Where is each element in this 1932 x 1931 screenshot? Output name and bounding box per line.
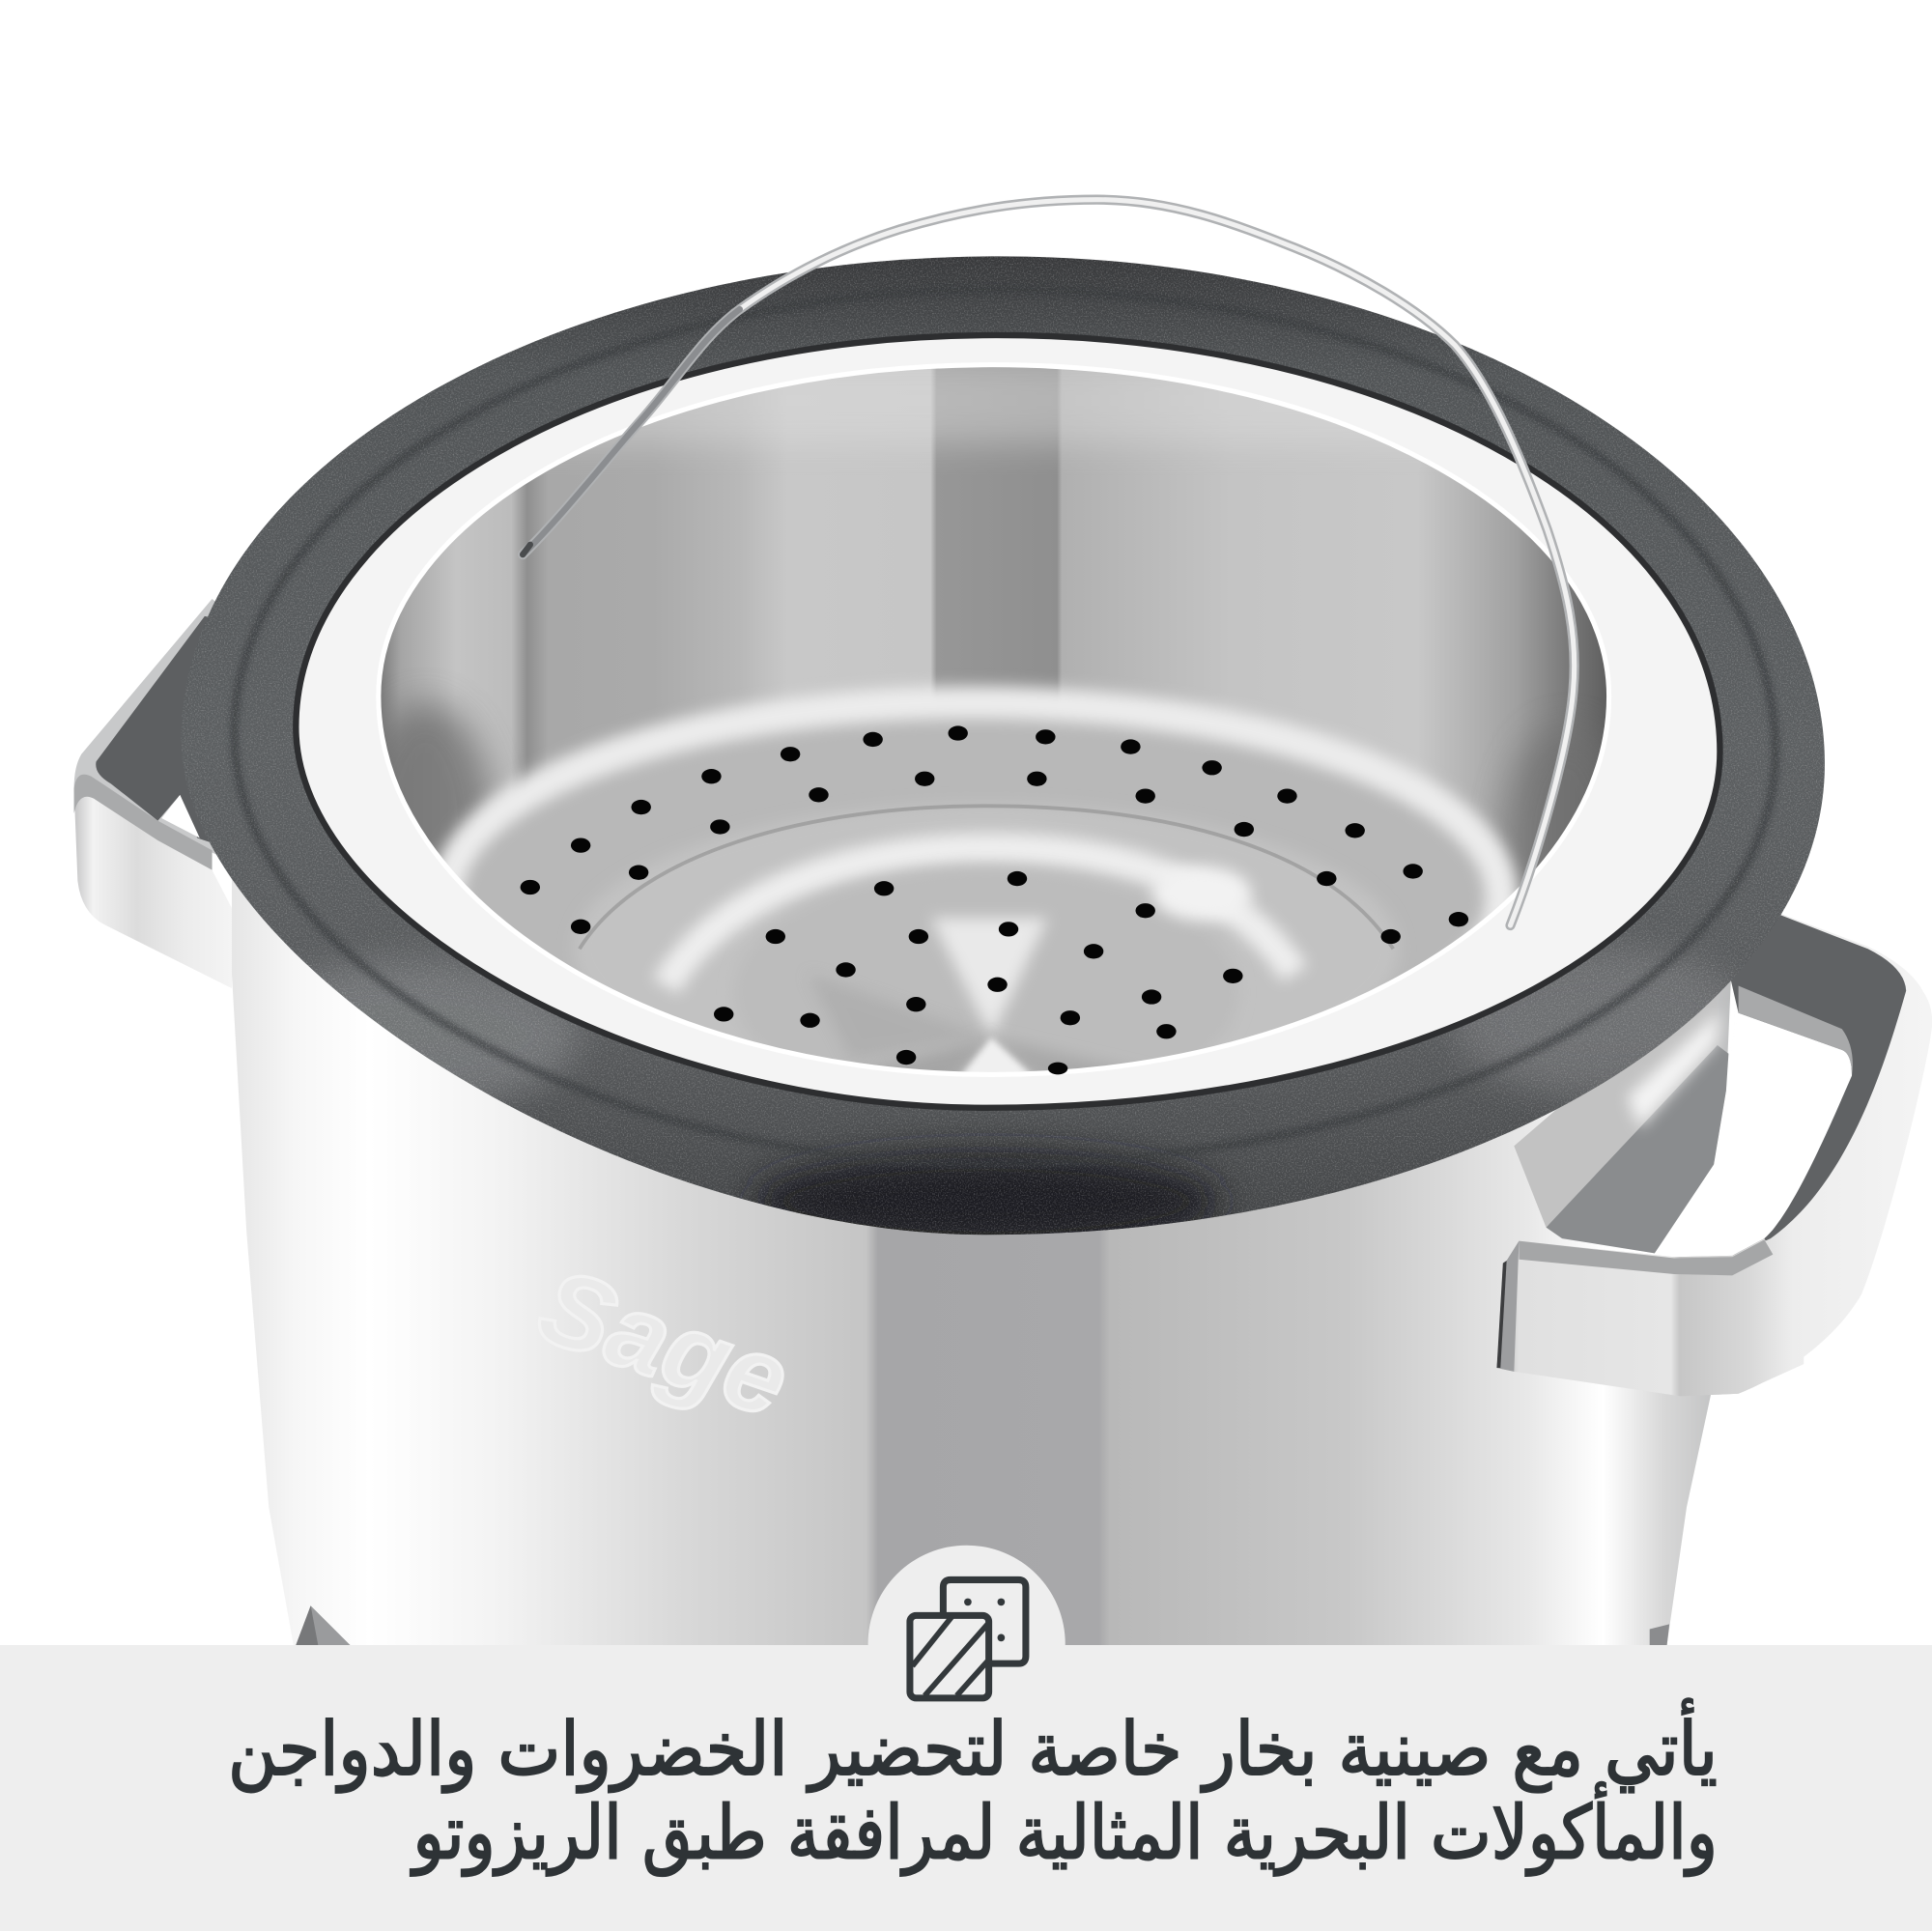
caption text (228, 1698, 1718, 1877)
caption line 2: والمأكولات البحرية المثالية لمرافقة طبق الريزوتو (410, 1782, 1718, 1877)
left handle (74, 599, 235, 988)
caption band (0, 1645, 1932, 1931)
dark rim (182, 256, 1825, 1251)
steam holes (521, 725, 1468, 1074)
right handle (1496, 912, 1932, 1396)
caption line 1: يأتي مع صينية بخار خاصة لتحضير الخضروات والدواجن (228, 1698, 1718, 1793)
embossed Sage logo: Sage (526, 1246, 803, 1440)
handle mount block (1496, 1238, 1804, 1396)
product photo: rice cooker (74, 200, 1932, 1645)
body shaded wedge by handle (1547, 1042, 1728, 1253)
steam basket interior (381, 367, 1607, 1072)
rim speckle texture (182, 256, 1825, 1235)
basket wire handle (523, 200, 1575, 925)
brushed steel light beams (931, 918, 1048, 1037)
foot details (296, 1605, 350, 1645)
white inner ring (296, 335, 1719, 1108)
icon background circle (868, 1546, 1065, 1743)
pot body (232, 863, 1804, 1645)
basket rim highlight (379, 365, 1609, 1074)
basket floor (459, 713, 1483, 980)
icon: steam tray (910, 1579, 1026, 1698)
